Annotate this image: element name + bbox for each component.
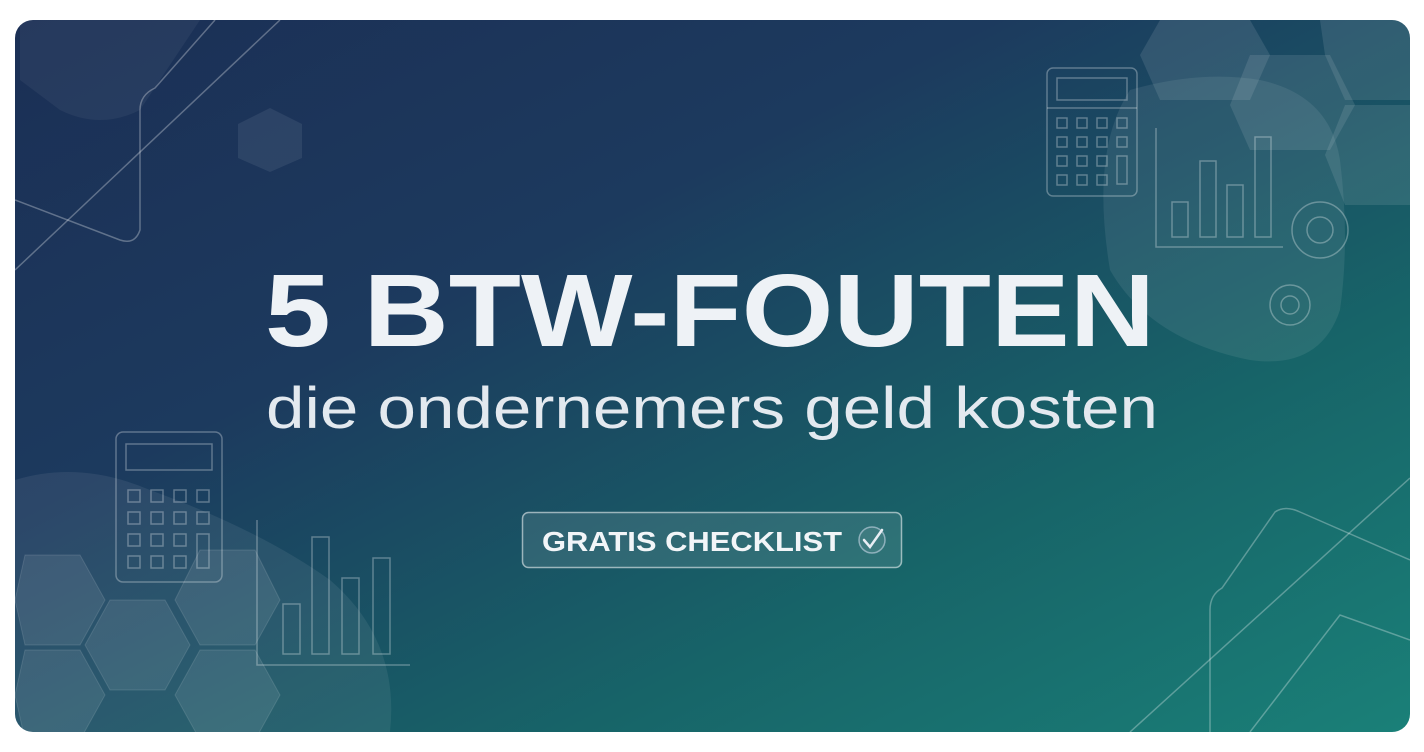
title: 5 BTW-FOUTEN [265,253,1155,368]
button: gratis checklist: GRATIS CHECKLIST [542,526,842,557]
decoration: top-left shapes [15,20,280,270]
decoration: bottom-left hexagons, calculator, chart [15,432,410,740]
subtitle: die ondernemers geld kosten [266,376,1158,441]
icon: check circle [859,527,885,553]
button: gratis checklist [522,512,902,568]
decoration: bottom-right lines [1130,478,1410,732]
decoration: top-right hexagons, calculator, chart, gears [1047,20,1410,361]
